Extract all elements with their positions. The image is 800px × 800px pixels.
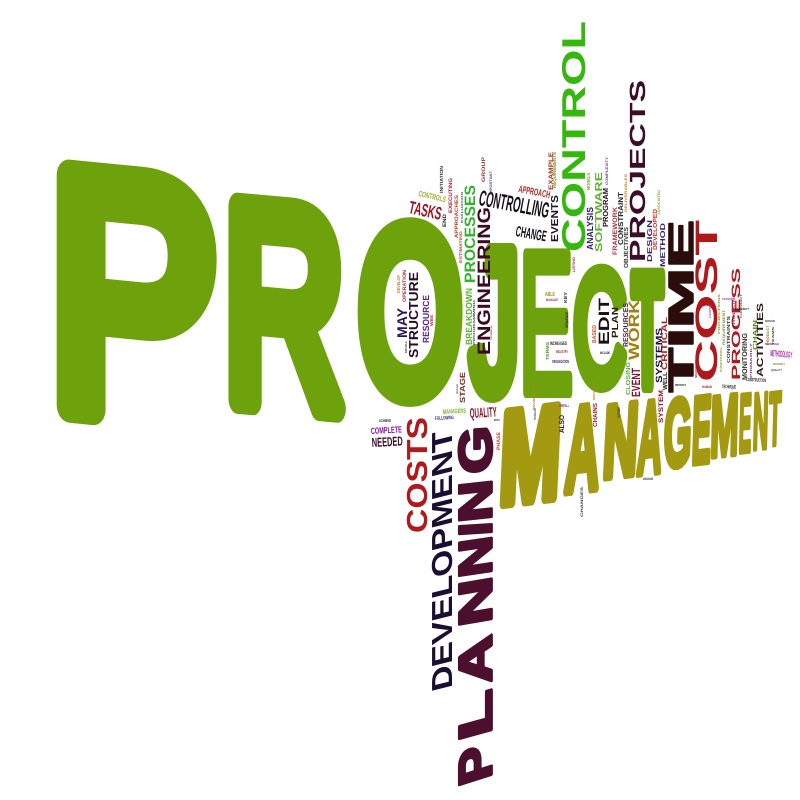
word cloud: small horizontal words: CONSTRUCTION — [746, 377, 766, 384]
word cloud: small horizontal words: MANAGE — [546, 298, 559, 302]
title word: PROJECT: C — [573, 239, 626, 419]
word cloud: small vertical words: CHANGES — [580, 486, 584, 517]
word cloud: small vertical words: DELIVERABLES — [624, 173, 628, 212]
word cloud: small vertical words: ESTIMATING — [458, 231, 463, 263]
word cloud: small vertical words: REQUIREMENT — [722, 309, 726, 345]
title word: MANAGEMENT: T — [768, 376, 782, 462]
word cloud: small vertical words: CLIENT — [708, 304, 712, 318]
word cloud: small horizontal words: SERVICE — [765, 319, 775, 323]
word cloud: small vertical words: PHASE — [496, 431, 502, 450]
word cloud: small vertical words: WBS — [429, 315, 434, 326]
title word: PROJECT — [49, 103, 663, 494]
title word: MANAGEMENT: M — [709, 376, 740, 476]
word: CONTROL: CONTROL — [555, 21, 592, 252]
word cloud: small vertical words: IMPORTANT — [489, 170, 493, 195]
word cloud: small vertical words: KEY — [563, 292, 568, 303]
word cloud: small vertical words: OUTSIDE — [617, 407, 621, 418]
word cloud: small vertical words: GROUP — [481, 156, 487, 182]
word: APPROACH: APPROACH — [517, 184, 551, 201]
title word: MANAGEMENT: N — [752, 376, 770, 467]
title word: PLANNING: G — [449, 424, 502, 475]
word cloud: small vertical words: DESIGN — [647, 220, 654, 262]
title word: PLANNING: A — [449, 632, 502, 689]
word cloud: small vertical words: DEVELOPED — [652, 208, 659, 250]
title word: MANAGEMENT: E — [738, 377, 753, 470]
word: ACTIVITIES: ACTIVITIES — [755, 303, 765, 377]
word: CRITICAL: CRITICAL — [660, 317, 669, 370]
word: RESOURCE: RESOURCE — [421, 295, 431, 343]
word cloud: small horizontal words: MANAGERS — [443, 408, 466, 416]
word cloud: small vertical words: FRAMEWORK — [612, 207, 619, 255]
word: PROCESSES: PROCESSES — [462, 185, 479, 283]
title word: PROJECT: P — [49, 103, 217, 494]
word cloud: small horizontal words: FOLLOWING — [435, 415, 454, 422]
word cloud: small vertical words: MEDIA — [404, 340, 408, 353]
word cloud: small horizontal words: ABLE — [545, 291, 555, 298]
title word: PLANNING: L — [449, 685, 502, 746]
word cloud: small vertical words: TERMS — [545, 342, 550, 360]
word: TIME: TIME — [662, 220, 701, 392]
title word: MANAGEMENT: N — [601, 382, 641, 500]
title word: MANAGEMENT: M — [497, 379, 564, 533]
title word: PROJECT: J — [470, 212, 519, 434]
word cloud: small vertical words: STAGE — [458, 372, 467, 403]
word: COST: COST — [689, 220, 724, 382]
word cloud: small vertical words: CONSTRAINT — [618, 191, 625, 245]
word cloud: small vertical words: CONTRACT — [739, 294, 743, 318]
word cloud: small horizontal words: OFTEN — [668, 258, 676, 262]
word cloud: small horizontal words: ACHIEVE — [379, 418, 391, 423]
word: COMPLETE: COMPLETE — [371, 424, 402, 436]
word cloud: small vertical words: ALSO — [559, 414, 566, 433]
title word: PLANNING: N — [449, 573, 502, 630]
title word: MANAGEMENT: G — [662, 378, 693, 488]
word cloud: small vertical words: CHAINS — [592, 403, 599, 427]
title word: PROJECT: O — [358, 183, 462, 444]
word cloud: small vertical words: MANAGED — [592, 381, 596, 400]
word cloud: small vertical words: DEVELOP — [396, 275, 401, 293]
word: TASKS: TASKS — [407, 197, 444, 224]
word cloud: small horizontal words: MAXIMUM — [643, 477, 653, 481]
word cloud: small horizontal words: CONTROLS — [418, 189, 447, 204]
word cloud: small vertical words: PROGRAMMING — [472, 299, 476, 345]
title word: PROJECT: R — [224, 147, 345, 470]
word cloud: small horizontal words: BODY — [494, 418, 500, 422]
word cloud: small vertical words: TEAMS — [771, 327, 775, 345]
word cloud: large vertical words: QUALITY — [469, 404, 497, 421]
title word: MANAGEMENT: A — [563, 380, 603, 518]
word cloud: small vertical words: ASSOCIATED — [657, 189, 661, 215]
word cloud: small vertical words: EXAMPLE — [548, 151, 555, 190]
title word: PLANNING: N — [449, 477, 502, 525]
word cloud: large vertical words: CHANGE — [514, 223, 548, 245]
word cloud: small vertical words: END — [442, 214, 448, 227]
word: BREAKDOWN: BREAKDOWN — [464, 288, 474, 345]
word: PROJECTS: PROJECTS — [625, 80, 650, 262]
word: EVENT: EVENT — [629, 368, 643, 397]
title word: PLANNING — [449, 424, 502, 792]
word: WORK: WORK — [626, 300, 643, 360]
word cloud: small vertical words: FUNCTIONAL — [719, 347, 723, 372]
word cloud: small horizontal words: ORGANIZATION — [552, 359, 569, 364]
word cloud: small vertical words: PROJECTIONS — [717, 294, 721, 334]
word: COSTS: COSTS — [402, 417, 434, 533]
word cloud: small horizontal words: REPORTS — [675, 383, 686, 387]
title word: PROJECT: T — [632, 242, 663, 420]
title word: PLANNING: I — [449, 520, 502, 538]
word cloud: small vertical words: CONSTRAINTS — [726, 316, 731, 363]
word cloud: small vertical words: CHAIN — [752, 320, 759, 350]
word cloud: small vertical words: MONITORING — [742, 332, 749, 380]
word cloud: small vertical words: RESOURCES — [623, 303, 630, 347]
word cloud: small vertical words: EXECUTING — [448, 178, 454, 213]
word cloud: small vertical words: PRODUCTION — [732, 293, 736, 324]
word cloud: small vertical words: CLOSING — [625, 362, 632, 395]
word cloud: small vertical words: METHOD — [660, 223, 667, 267]
word cloud: small vertical words: SYSTEM — [658, 390, 665, 423]
word cloud: small vertical words: PROGRAM — [601, 188, 610, 227]
word cloud: small vertical words: TRIANGLE — [533, 408, 537, 420]
word: EDIT: EDIT — [596, 298, 613, 345]
word cloud: small vertical words: LISTING — [572, 257, 576, 272]
word: STRUCTURE: STRUCTURE — [406, 272, 421, 358]
word cloud: small vertical words: OBJECTIVES — [623, 227, 630, 268]
word cloud: small vertical words: MODELS — [586, 173, 591, 190]
word cloud: small vertical words: IMAGE — [456, 384, 459, 394]
word cloud: small vertical words: COMPLEXITY — [605, 156, 609, 185]
word cloud: small horizontal words: QUALITY — [771, 368, 782, 372]
title word: MANAGEMENT: E — [690, 376, 713, 485]
word cloud: small horizontal words: INCREASED — [550, 341, 567, 347]
word cloud: small vertical words: ENVIRONMENTS — [532, 380, 536, 410]
word cloud: small vertical words: WELL — [662, 372, 669, 390]
title word: PLANNING: P — [449, 737, 502, 792]
word cloud: small vertical words: APPROACHES — [454, 194, 460, 238]
word cloud: small vertical words: OPERATION — [402, 270, 408, 302]
title word: MANAGEMENT: A — [636, 379, 664, 496]
word cloud: small vertical words: ANALYSIS — [585, 207, 595, 250]
word cloud: small vertical words: EVENTS — [550, 195, 561, 242]
word cloud: small horizontal words: OVERALL — [559, 403, 569, 408]
word cloud: small horizontal words: INDUSTRY — [556, 349, 568, 354]
title word: PLANNING: N — [449, 533, 502, 581]
word cloud: small vertical words — [396, 151, 775, 517]
word cloud: small vertical words: BASED — [592, 325, 598, 343]
word cloud: small vertical words: SEQUENCE — [565, 311, 569, 328]
word cloud: large vertical words: CONTROLLING — [477, 185, 551, 223]
word cloud: small vertical words: REQUIREMENTS — [552, 152, 557, 188]
word: NEEDED: NEEDED — [371, 433, 403, 450]
word: MAY: MAY — [394, 307, 410, 338]
word cloud: small vertical words: PRODUCT — [766, 324, 770, 345]
word cloud: small horizontal words: PROVIDE — [722, 297, 734, 301]
word cloud: small horizontal words — [379, 189, 793, 481]
word cloud: small horizontal words: INCLUDE — [600, 351, 610, 355]
word: PROCESS: PROCESS — [729, 268, 743, 380]
word cloud: small horizontal words: HUMAN — [702, 385, 712, 389]
word cloud: small horizontal words: BUDGET — [773, 362, 785, 366]
word cloud: small horizontal words: CONCEPT — [735, 307, 749, 311]
word: SYSTEMS: SYSTEMS — [654, 328, 664, 383]
word cloud: small vertical words: INITIATION — [439, 166, 444, 193]
word: DEVELOPMENT: DEVELOPMENT — [427, 426, 459, 694]
title word: PROJECT: E — [519, 212, 573, 436]
word: ENGINEERING: ENGINEERING — [474, 207, 494, 355]
word cloud: small vertical words: PRIMARILY — [749, 343, 753, 378]
word cloud: small horizontal words: SCHEDULE — [765, 342, 779, 346]
word cloud: small vertical words: TECHNICAL — [490, 325, 493, 340]
word cloud: small vertical words: PLAN — [610, 307, 620, 338]
title word: MANAGEMENT — [497, 376, 782, 533]
word: SOFTWARE: SOFTWARE — [594, 172, 605, 252]
word cloud: small vertical words: EVALUATION — [460, 192, 464, 223]
word cloud: small horizontal words: TECHNIQUE — [722, 384, 737, 391]
word cloud: large vertical words — [371, 21, 765, 694]
word cloud: small vertical words: NECESSARY — [694, 360, 698, 378]
